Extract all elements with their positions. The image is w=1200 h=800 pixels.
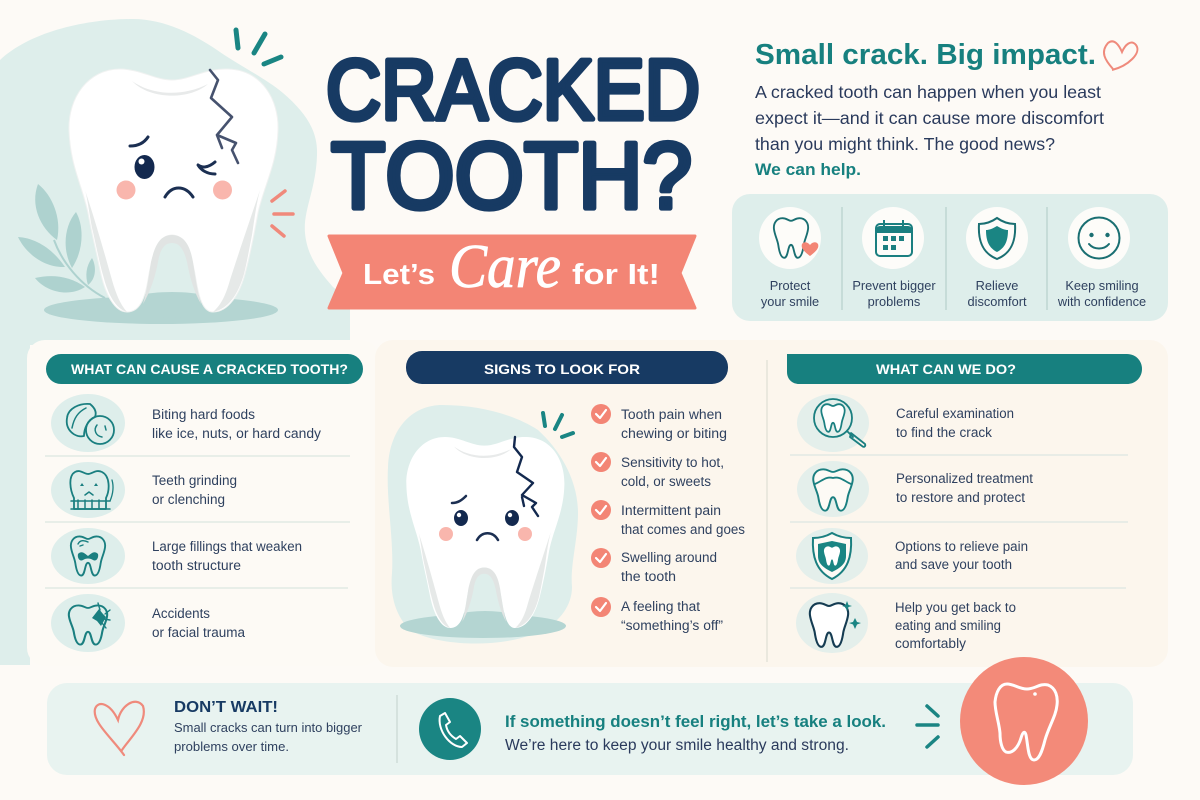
action: smiling again [796, 593, 1016, 653]
sign 4 [591, 548, 717, 584]
cause: accidents: or facial trauma [152, 625, 245, 640]
leaf sprig [18, 184, 105, 298]
action: smiling again: Help you get back to [895, 600, 1016, 615]
bottom banner [47, 657, 1133, 785]
face [116, 137, 232, 200]
sign 1 [591, 404, 727, 441]
sign 3: Intermittent pain [621, 503, 721, 518]
cause: accidents [51, 594, 245, 652]
heading pill [787, 354, 1142, 384]
ribbon: Let's Care for It: Let’s [363, 259, 435, 291]
heading pill [406, 351, 728, 384]
tooth body [69, 69, 278, 312]
ribbon: Let's Care for It: Care [449, 233, 561, 301]
heading pill [46, 354, 363, 384]
call to action: We’re here to keep your smile healthy and strong. [505, 737, 849, 754]
benefit: relieve discomfort [966, 207, 1028, 309]
rays [917, 706, 938, 747]
sign 5: “something’s off” [621, 618, 723, 633]
icon: phone [419, 698, 481, 760]
intro text block: A cracked tooth can happen when you least [755, 82, 1101, 102]
benefit: prevent bigger problems: problems [868, 294, 920, 309]
tooth shading [85, 81, 260, 312]
cause: teeth grinding: or clenching [152, 492, 225, 507]
heading pill: WHAT CAN WE DO? [876, 361, 1016, 377]
intro text block: than you might think. The good news? [755, 134, 1055, 154]
panel: benefits [732, 194, 1168, 321]
sign 4: Swelling around [621, 550, 717, 565]
cause: teeth grinding [51, 462, 237, 518]
title: CRACKED [326, 42, 700, 138]
benefit: prevent bigger problems [852, 207, 936, 309]
benefit: keep smiling: with confidence [1057, 294, 1146, 309]
sign 5: A feeling that [621, 599, 700, 614]
benefit: relieve discomfort: Relieve [976, 278, 1018, 293]
action: smiling again: comfortably [895, 636, 966, 651]
action: examination: Careful examination [896, 406, 1014, 421]
title: TOOTH? [331, 124, 692, 229]
benefit: protect your smile: your smile [761, 294, 819, 309]
panel: what can cause a cracked tooth [45, 354, 363, 652]
cause: large fillings: Large fillings that weaken [152, 539, 302, 554]
panel: what can we do [767, 354, 1142, 662]
don't wait message: problems over time. [174, 739, 289, 754]
illustration: small cracked tooth [388, 405, 578, 644]
ribbon: Let's Care for It [329, 233, 695, 308]
benefit: keep smiling [1057, 207, 1146, 309]
cause: hard foods [51, 394, 321, 452]
sign 3 [591, 500, 745, 537]
mint background blob [0, 19, 350, 665]
action: treatment [797, 461, 1033, 517]
call to action: If something doesn’t feel right, let’s take a look. [505, 712, 886, 731]
action: relieve pain: and save your tooth [895, 557, 1012, 572]
intro text block [755, 39, 1104, 179]
sign 3: that comes and goes [621, 522, 745, 537]
cause: accidents: Accidents [152, 606, 210, 621]
coral tooth badge [960, 657, 1088, 785]
sign 1: Tooth pain when [621, 407, 722, 422]
benefit: prevent bigger problems: Prevent bigger [852, 278, 936, 293]
icon: heart outline [1104, 41, 1137, 70]
panel: causes background [27, 340, 379, 666]
don't wait message: Small cracks can turn into bigger [174, 720, 363, 735]
action: relieve pain [796, 528, 1028, 584]
illustration: sad cracked tooth [18, 30, 293, 324]
coral rays [272, 191, 293, 236]
teal rays [236, 30, 281, 64]
ribbon: Let's Care for It: for It! [572, 259, 660, 291]
call to action [505, 712, 886, 754]
action: smiling again: eating and smiling [895, 618, 1001, 633]
heading pill: SIGNS TO LOOK FOR [484, 361, 640, 377]
sign 2: Sensitivity to hot, [621, 455, 724, 470]
benefit: relieve discomfort: discomfort [967, 294, 1027, 309]
sign 2: cold, or sweets [621, 474, 711, 489]
sign 1: chewing or biting [621, 426, 727, 441]
sign 2 [591, 452, 724, 489]
benefit: protect your smile [759, 207, 821, 309]
panel: signs to look for [388, 351, 745, 644]
cause: hard foods: like ice, nuts, or hard candy [152, 426, 321, 441]
intro text block: We can help. [755, 160, 861, 179]
cause: teeth grinding: Teeth grinding [152, 473, 237, 488]
cause: hard foods: Biting hard foods [152, 407, 255, 422]
sign 4: the tooth [621, 569, 676, 584]
panel: signs and actions background [375, 340, 1168, 667]
intro text block: Small crack. Big impact. [755, 39, 1096, 71]
action: treatment: Personalized treatment [896, 471, 1033, 486]
icon: heart [95, 702, 144, 755]
benefit: keep smiling: Keep smiling [1065, 278, 1139, 293]
action: examination: to find the crack [896, 425, 992, 440]
ground shadow [44, 292, 278, 324]
cause: large fillings: tooth structure [152, 558, 241, 573]
don't wait message [174, 699, 363, 754]
heading pill: WHAT CAN CAUSE A CRACKED TOOTH? [71, 361, 348, 377]
action: examination [797, 394, 1014, 452]
title [326, 42, 700, 229]
crack [210, 70, 238, 163]
benefit: protect your smile: Protect [770, 278, 811, 293]
intro text block: expect it—and it can cause more discomfort [755, 108, 1104, 128]
sign 5 [591, 597, 723, 633]
don't wait message: DON’T WAIT! [174, 699, 278, 716]
action: treatment: to restore and protect [896, 490, 1025, 505]
action: relieve pain: Options to relieve pain [895, 539, 1028, 554]
cause: large fillings [51, 528, 302, 584]
